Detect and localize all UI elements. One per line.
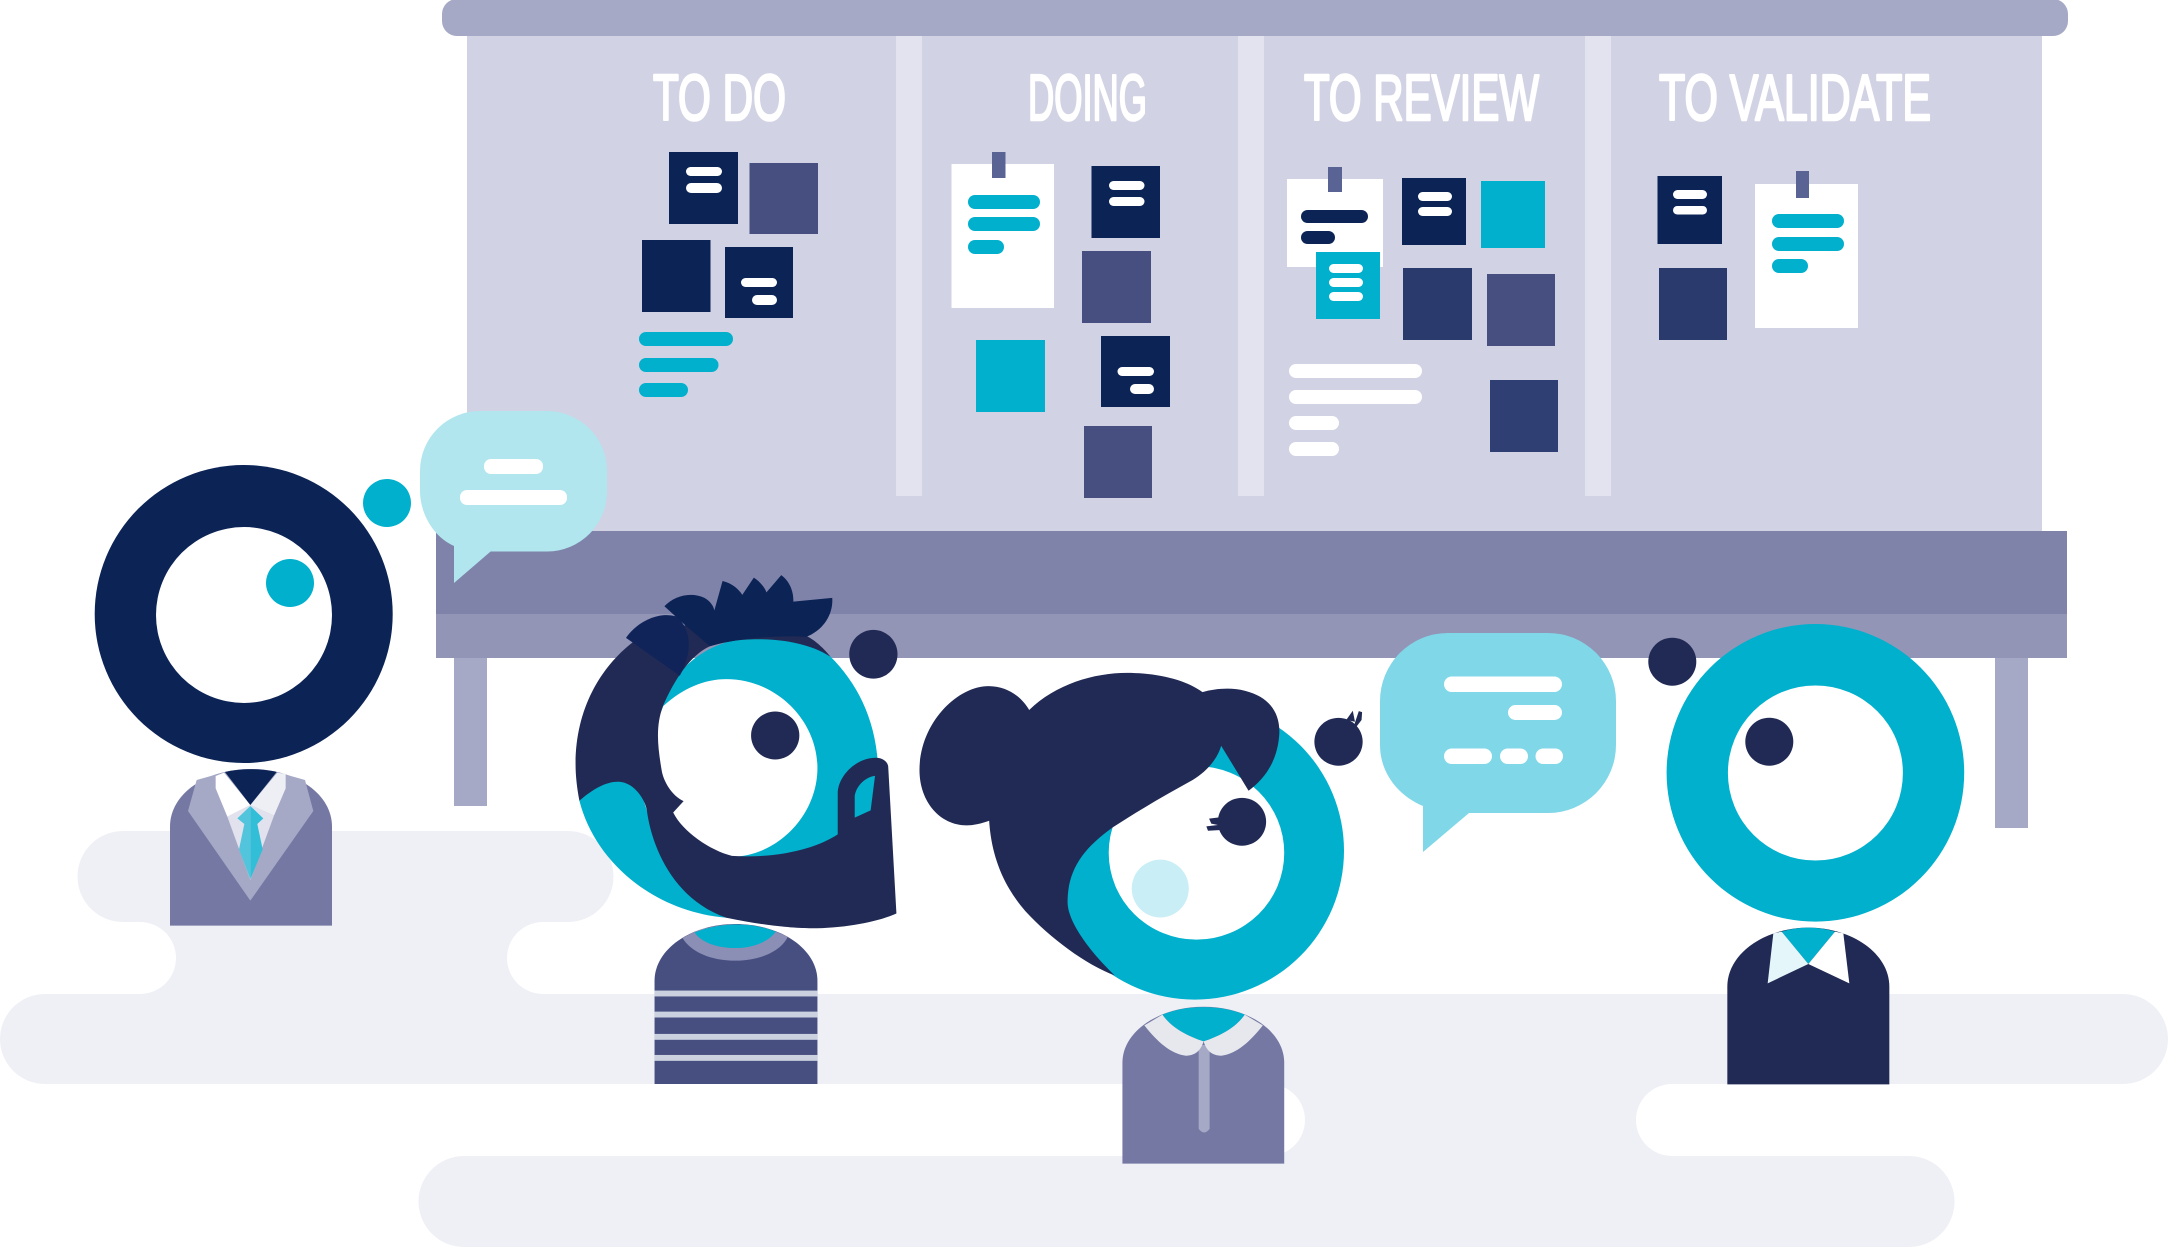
spiky hair	[664, 575, 832, 646]
table	[436, 531, 2067, 828]
person 4: teal head with dark shirt	[1667, 624, 1964, 1084]
blouse body	[1122, 1007, 1284, 1164]
person 1: navy head with suit	[95, 465, 393, 926]
shirt body	[1727, 928, 1889, 1084]
column: doing cards	[952, 152, 1170, 498]
board panel	[467, 30, 2042, 535]
head	[95, 465, 393, 763]
cheek	[1132, 860, 1189, 917]
thought dot	[849, 630, 898, 679]
head	[1046, 702, 1344, 1000]
heading: to do: TO DO	[653, 61, 786, 134]
ear	[855, 776, 875, 818]
floor cloud background	[0, 831, 2168, 1247]
suit body	[170, 769, 332, 926]
heading: doing: DOING	[1028, 61, 1147, 134]
column: to do cards	[639, 152, 818, 397]
striped sweater body	[655, 924, 817, 1084]
heading: to validate: TO VALIDATE	[1659, 61, 1931, 134]
person 3: teal head with dark bun hair	[919, 673, 1363, 1164]
eye white	[636, 679, 817, 861]
hair and beard	[576, 625, 896, 928]
person 2: teal head with spiky hair and beard	[576, 575, 898, 1084]
hair tuft	[626, 615, 689, 676]
speech bubble: person 3	[1380, 633, 1616, 852]
board top rail	[442, 0, 2068, 36]
column dividers	[896, 36, 1611, 496]
pupil	[751, 711, 799, 759]
kanban board	[442, 0, 2068, 535]
thought dot: person 4	[1648, 638, 1696, 686]
thought dot: person 1	[363, 479, 411, 527]
eye with lashes	[1206, 798, 1266, 846]
thought dot with lashes	[1314, 711, 1363, 766]
hair with bun	[919, 673, 1279, 975]
column: to review cards	[1287, 167, 1558, 456]
speech bubble: person 1	[420, 411, 607, 583]
head	[1667, 624, 1964, 922]
column: to validate cards	[1658, 171, 1858, 340]
head	[579, 637, 883, 918]
heading: to review: TO REVIEW	[1304, 61, 1539, 134]
